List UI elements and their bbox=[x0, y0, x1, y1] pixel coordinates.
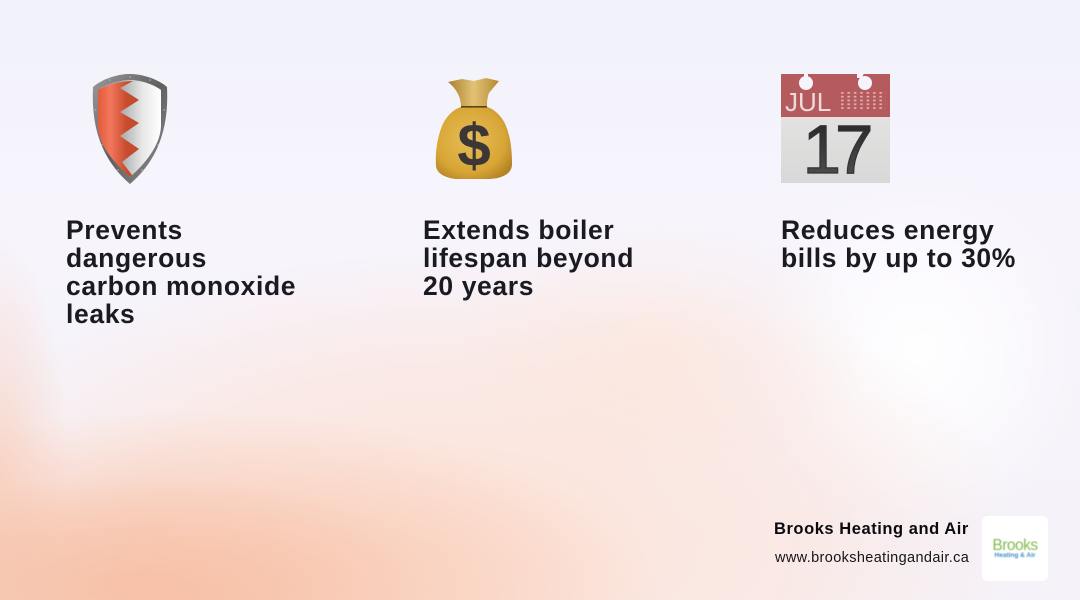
icon: money bag bbox=[436, 78, 512, 179]
logo wordmark: Heating & Air bbox=[995, 552, 1035, 559]
text: reduces bills: Reduces energy bbox=[781, 215, 994, 245]
company name: Brooks Heating and Air bbox=[774, 520, 969, 538]
icon: calendar: 17 bbox=[803, 111, 870, 186]
text: reduces bills: bills by up to 30% bbox=[781, 243, 1016, 273]
text: reduces bills bbox=[781, 215, 1016, 273]
text: extends lifespan: Extends boiler bbox=[423, 215, 614, 245]
logo card bbox=[982, 516, 1048, 581]
text: extends lifespan: lifespan beyond bbox=[423, 243, 634, 273]
text: extends lifespan bbox=[423, 215, 634, 301]
text: prevents leaks: dangerous bbox=[66, 243, 207, 273]
icon: money bag: $ bbox=[457, 112, 491, 179]
website: www.brooksheatingandair.ca bbox=[775, 550, 969, 566]
text: prevents leaks: leaks bbox=[66, 299, 135, 329]
logo wordmark: Brooks bbox=[992, 537, 1038, 554]
text: prevents leaks bbox=[66, 215, 296, 329]
icon: calendar: JUL bbox=[785, 87, 831, 117]
icon: calendar bbox=[781, 74, 890, 186]
text: prevents leaks: Prevents bbox=[66, 215, 183, 245]
text: extends lifespan: 20 years bbox=[423, 271, 534, 301]
icon: shield bbox=[92, 74, 168, 184]
text: prevents leaks: carbon monoxide bbox=[66, 271, 296, 301]
